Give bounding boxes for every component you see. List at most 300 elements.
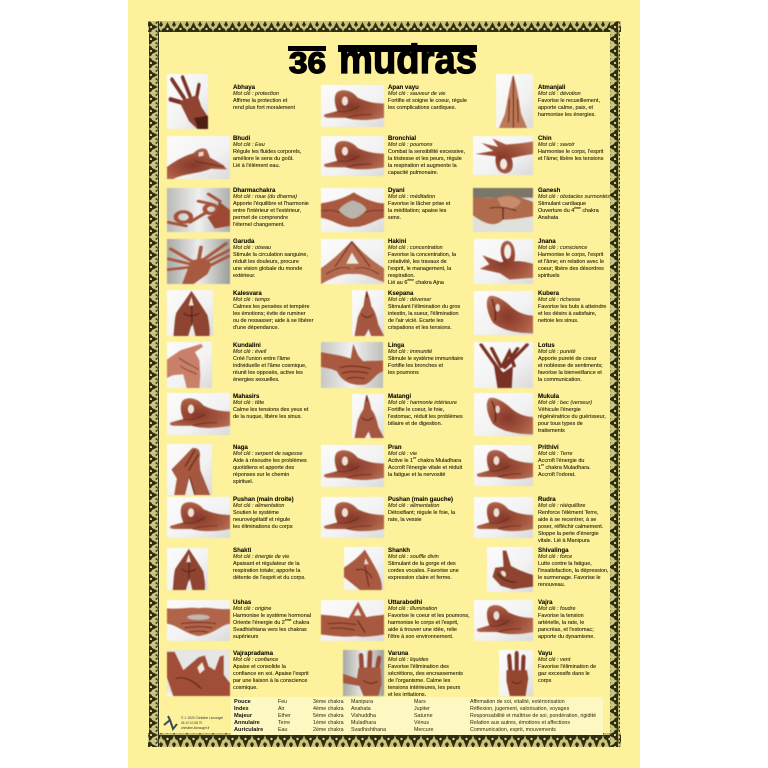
text: Dharmachakra: Apporte l'équilibre et l'harmonie bbox=[233, 200, 309, 206]
ornamental border frame bbox=[148, 21, 621, 747]
text: Shankh: Shankh bbox=[388, 546, 410, 554]
text: Vajra: artérielle, la rate, le bbox=[538, 620, 584, 626]
text: Dharmachakra: Dharmachakra bbox=[233, 186, 275, 194]
mudra: Shakti bbox=[167, 546, 317, 596]
column: chakra names: Vishuddha bbox=[351, 712, 376, 718]
text: Vajrapradama: cosmique. bbox=[233, 684, 258, 690]
text: Bronchial: la respiration et augmente la bbox=[388, 162, 457, 168]
text: Bhudi: Régule les fluides corporels, bbox=[233, 148, 301, 154]
text: Vajrapradama: Mot clé : confiance bbox=[233, 656, 278, 662]
text: Shankh: expression claire et ferme. bbox=[388, 574, 452, 580]
text: Ushas: Svadhishtana vers les chakras bbox=[233, 626, 307, 632]
text: Atmanjali: Atmanjali bbox=[538, 84, 565, 90]
text: Chin: Harmonise le corps, l'esprit bbox=[538, 148, 603, 154]
text: Jnana: Mot clé : conscience bbox=[538, 244, 587, 250]
column: elements: Terre bbox=[278, 720, 290, 726]
text: Kalesvara bbox=[233, 290, 313, 332]
column: fingers: Majeur bbox=[234, 712, 252, 718]
text: Kalesvara: d'une dépendance. bbox=[233, 324, 279, 330]
text: Garuda: extérieur. bbox=[233, 272, 255, 278]
text: Kubera: Kubera bbox=[538, 290, 559, 296]
text: Mukula: Véhicule l'énergie bbox=[538, 406, 581, 412]
column: chakra names: Muladhara bbox=[351, 720, 376, 726]
mudra: Prithivi bbox=[473, 443, 608, 493]
photo: Mukula bbox=[474, 393, 533, 436]
column: chakra names bbox=[351, 698, 386, 734]
text: Shivalinga: Shivalinga bbox=[538, 546, 568, 554]
text: Naga: Mot clé : serpent de sagesse bbox=[233, 450, 303, 456]
mudra: Atmanjali bbox=[496, 74, 600, 129]
text: Vajrapradama: confiance en soi. Apaise l'esprit bbox=[233, 670, 309, 676]
text: Linga: les poumons bbox=[388, 370, 419, 376]
photo: Bronchial bbox=[320, 136, 385, 176]
text: Ksepana: Stimulant l'élimination du gros bbox=[388, 304, 460, 310]
text: Lotus: Lotus bbox=[538, 342, 555, 348]
text: Prithivi: Accroît l'odorat. bbox=[538, 472, 576, 478]
text: Vayu: gaz excessifs dans le bbox=[538, 670, 590, 676]
text: Prithivi: 1er chakra Muladhara. bbox=[538, 463, 591, 470]
column: chakra number: 1ème chakra bbox=[313, 720, 344, 726]
text: Varuna: Favorise l'élimination des bbox=[388, 664, 449, 670]
text: Bronchial: Mot clé : poumons bbox=[388, 142, 432, 148]
mudra: Vajra bbox=[473, 598, 608, 648]
text: Shankh: Mot clé : souffle divin bbox=[388, 554, 439, 560]
text: Vajra: Vajra bbox=[538, 598, 553, 606]
photo: Garuda bbox=[166, 238, 231, 285]
mudra: Shankh bbox=[321, 546, 471, 596]
photo: Ganesh bbox=[472, 187, 534, 232]
mudra: Kubera bbox=[473, 289, 608, 339]
mudra: Rudra bbox=[473, 495, 608, 545]
contact text bbox=[181, 716, 223, 731]
text: Pushan main gauche: Détoxifiant; régule le foie, la bbox=[388, 510, 455, 516]
photo: Matangi bbox=[352, 394, 384, 438]
photo: Uttarabodhi bbox=[321, 600, 384, 641]
text: Ksepana: de l'air vicié. Ecarte les bbox=[388, 318, 443, 324]
text: Hakini: Lié au 6ème chakra Ajna bbox=[388, 278, 444, 286]
text: Shivalinga bbox=[538, 546, 609, 588]
text: Lotus: favorise la bienveillance et bbox=[538, 370, 602, 376]
text: Hakini: respiration. bbox=[388, 272, 415, 278]
photo: Vajrapradama bbox=[167, 650, 230, 696]
mudra: Garuda bbox=[166, 238, 308, 285]
text: Uttarabodhi: Mot clé : illumination bbox=[388, 606, 437, 612]
text: Apan vayu: Mot clé : sauveur de vie bbox=[388, 90, 445, 96]
photo: Kundalini bbox=[167, 342, 212, 388]
text: Pran: Mot clé : vie bbox=[388, 450, 417, 456]
mudra: Uttarabodhi bbox=[321, 598, 471, 648]
column: meanings: Réflexion, jugement, valorisation, voyages bbox=[470, 706, 569, 712]
text: Pran bbox=[388, 444, 462, 478]
photo: Prithivi bbox=[474, 445, 533, 486]
photo: Shakti bbox=[167, 548, 208, 590]
text: Shakti bbox=[233, 546, 306, 582]
mudra: Vayu bbox=[473, 649, 608, 699]
photo: Varuna bbox=[343, 650, 384, 696]
text: Shakti: Mot clé : énergie de vie bbox=[233, 554, 289, 560]
text: Chin bbox=[538, 134, 604, 162]
text: Atmanjali: Favorise le recueillement, bbox=[538, 98, 600, 104]
text: Linga bbox=[388, 342, 463, 376]
text: Garuda: une vision globale du monde bbox=[233, 266, 302, 272]
text: Rudra: aide à se recentrer, à se bbox=[538, 516, 596, 522]
photo: Naga bbox=[167, 444, 212, 495]
text: Varuna: tensions intérieures, les peurs bbox=[388, 684, 460, 690]
text: Apan vayu: les complications cardiques. bbox=[388, 104, 456, 110]
text: Hakini: Mot clé : concentration bbox=[388, 244, 443, 250]
text: Kalesvara: les émotions; évite de ruminer bbox=[233, 310, 306, 316]
text: Hakini: créativité, les travaux de bbox=[388, 258, 447, 264]
mudra: Varuna bbox=[321, 649, 471, 699]
text: Vajra: apporte du dynamisme. bbox=[538, 634, 595, 640]
table: fingers, elements, chakras, planets bbox=[231, 697, 603, 735]
contact text: © J. 2020 Christine Lionaugel bbox=[181, 716, 223, 720]
text: Kundalini bbox=[233, 342, 307, 384]
text: Naga: Aide à résoudre les problèmes bbox=[233, 458, 307, 464]
text: Ushas: supérieurs bbox=[233, 634, 258, 640]
text: Linga: Stimule le système immunitaire bbox=[388, 356, 463, 362]
mudra: Chin bbox=[472, 134, 604, 176]
mudra: Mukula bbox=[473, 392, 608, 442]
text: Pushan main droite: Soutien le système bbox=[233, 510, 279, 516]
text: Lotus: Mot clé : pureté bbox=[538, 348, 575, 354]
text: Dyani: Mot clé : méditation bbox=[388, 194, 435, 200]
text: Varuna: de l'organisme. Calme les bbox=[388, 678, 450, 684]
text: Rudra: Rudra bbox=[538, 496, 556, 502]
column: meanings: Relation aux autres, émotions et affections bbox=[470, 720, 570, 726]
mudra: Mahasirs bbox=[167, 392, 317, 442]
mudra: Shivalinga bbox=[473, 546, 608, 596]
text: Mahasirs: Mot clé : tête bbox=[233, 400, 264, 406]
text: Ganesh: Mot clé : obstacles surmontés bbox=[538, 194, 610, 200]
text: Pushan main droite: Mot clé : alimentation bbox=[233, 502, 284, 508]
text: Pushan main droite: les éliminations du corps bbox=[233, 524, 293, 530]
text: Ushas bbox=[233, 598, 311, 640]
text: Kubera: et les désirs à satisfaire, bbox=[538, 310, 596, 316]
photo: Shankh bbox=[344, 547, 384, 590]
text: Bhudi bbox=[233, 134, 301, 168]
text: Vajra: Favorise la tension bbox=[538, 612, 584, 618]
text: Bronchial: Bronchial bbox=[388, 134, 416, 142]
text: Rudra: Mot clé : rééquilibre bbox=[538, 502, 585, 508]
column: chakra names: Svadhishthana bbox=[351, 726, 386, 732]
text: Pran: Pran bbox=[388, 444, 402, 450]
text: Bhudi: améliore le sens du goût. bbox=[233, 156, 294, 162]
text: Matangi: l'estomac, réduit les problèmes bbox=[388, 414, 463, 420]
column: meanings: Responsabilité et maîtrise de soi, pondération, rigidité bbox=[470, 712, 596, 718]
photo: Pushan main gauche bbox=[321, 497, 384, 538]
text: Dharmachakra bbox=[233, 186, 309, 228]
text: Ksepana: Mot clé : déverser bbox=[388, 296, 431, 302]
text: Pushan main droite: Pushan (main droite) bbox=[233, 496, 294, 502]
text: Garuda: réduit les douleurs, procure bbox=[233, 258, 299, 264]
text: Shankh: cordes vocales. Favorise une bbox=[388, 568, 459, 574]
photo: Ushas bbox=[167, 600, 230, 641]
text: Matangi: Fortifie le coeur, le foie, bbox=[388, 406, 444, 412]
text: Vajra bbox=[538, 598, 595, 640]
logo and contact bbox=[161, 713, 225, 733]
text: Bronchial bbox=[388, 134, 465, 176]
text: Naga: réponses sur le chemin bbox=[233, 472, 289, 478]
title: 36 bbox=[289, 47, 326, 80]
column: planets: Vénus bbox=[414, 720, 429, 726]
column: elements: Air bbox=[278, 706, 284, 712]
mudra: Ksepana bbox=[321, 289, 471, 339]
column: chakra number bbox=[313, 698, 344, 734]
mudra: Bronchial bbox=[320, 134, 465, 176]
text: Bhudi: Mot clé : Eau bbox=[233, 142, 265, 148]
text: Vajrapradama: par une liaison à la conscience bbox=[233, 678, 307, 684]
text: Mahasirs: de la nuque, libère les sinus. bbox=[233, 414, 302, 420]
mudra: Abhaya bbox=[166, 74, 296, 130]
mudra: Hakini bbox=[320, 238, 456, 286]
contact text: 06 10 10 58 70 bbox=[181, 721, 202, 725]
text: Prithivi: Accroît l'énergie du bbox=[538, 458, 584, 464]
mudra: Apan vayu bbox=[320, 84, 467, 128]
text: Bhudi: Bhudi bbox=[233, 134, 250, 142]
text: Prithivi: Mot clé : Terre bbox=[538, 450, 573, 456]
text: Abhaya: Affirme la protection et bbox=[233, 98, 287, 104]
text: Jnana bbox=[538, 238, 604, 278]
column: chakra number: 5ème chakra bbox=[313, 712, 344, 718]
column: chakra number: 2ème chakra bbox=[313, 726, 344, 732]
mudra: Kalesvara bbox=[166, 290, 314, 337]
text: Rudra: poser, réfléchir calmement. bbox=[538, 524, 603, 530]
text: Hakini: l'esprit, le management, la bbox=[388, 266, 451, 272]
text: Atmanjali: apporte calme, paix, et bbox=[538, 104, 593, 110]
text: Atmanjali: Mot clé : dévotion bbox=[538, 90, 581, 96]
text: Garuda: Stimule la circulation sanguine, bbox=[233, 252, 308, 258]
text: Mukula: Mot clé : bec (verseur) bbox=[538, 400, 592, 406]
text: Pran: Active le 1er chakra Muladhara bbox=[388, 456, 461, 464]
text: Varuna bbox=[388, 650, 463, 698]
column: elements: Ether bbox=[278, 712, 291, 718]
text: Shakti: respiration totale; apporte la bbox=[233, 568, 300, 574]
text: Ksepana: intestin, la sueur, l'élimination bbox=[388, 310, 459, 316]
column: fingers: Index bbox=[234, 706, 249, 712]
text: Ushas: Oriente l'énergie du 2ème chakra bbox=[233, 618, 309, 626]
mudra: Linga bbox=[321, 341, 471, 391]
column: fingers: Pouce bbox=[234, 698, 251, 704]
column: chakra names: Manipura bbox=[351, 698, 373, 704]
text: Pushan main droite: neurovégétatif et régule bbox=[233, 516, 290, 522]
text: Matangi: biliaire et de digestion. bbox=[388, 420, 442, 426]
text: Jnana: Jnana bbox=[538, 238, 556, 244]
text: Uttarabodhi: l'être à son environnement. bbox=[388, 634, 453, 640]
text: Chin: Chin bbox=[538, 134, 552, 142]
text: Jnana: spirituels bbox=[538, 272, 559, 278]
text: Dyani: Dyani bbox=[388, 186, 405, 194]
text: Pushan main gauche: rate, la vessie bbox=[388, 516, 422, 522]
text: Rudra: vitale. Lié à Manipura bbox=[538, 538, 590, 544]
text: Rudra: Renforce l'élément Terre, bbox=[538, 510, 598, 516]
text: Shakti: Shakti bbox=[233, 546, 251, 554]
column: planets: Mars bbox=[414, 698, 426, 704]
column: planets bbox=[414, 698, 433, 734]
text: Matangi: Mot clé : harmonie intérieure bbox=[388, 400, 457, 406]
text: Shankh: Stimulant de la gorge et des bbox=[388, 560, 456, 566]
photo: Kalesvara bbox=[166, 290, 214, 337]
photo: Dyani bbox=[320, 188, 385, 232]
photo: Pushan main droite bbox=[167, 497, 230, 538]
column: elements: Eau bbox=[278, 726, 287, 732]
column: planets: Jupiter bbox=[414, 706, 430, 712]
photo: Lotus bbox=[474, 342, 533, 388]
text: Kalesvara: Calmes les pensées et tempère bbox=[233, 304, 309, 310]
text: Vajrapradama: Apaise et consolide la bbox=[233, 664, 286, 670]
text: Jnana: et l'âme; en relation avec le bbox=[538, 258, 604, 264]
text: Ksepana bbox=[388, 290, 460, 332]
text: Garuda: Garuda bbox=[233, 238, 254, 244]
photo: Vayu bbox=[499, 650, 533, 696]
text: Uttarabodhi: aide à trouver une idée, relie bbox=[388, 626, 457, 632]
mudra: Ushas bbox=[167, 598, 317, 648]
text: Varuna: sécrétions, des encrassements bbox=[388, 670, 463, 676]
text: Kalesvara: ou de ressasser; aide à se libérer bbox=[233, 318, 313, 324]
text: Naga bbox=[233, 444, 307, 486]
text: Shankh bbox=[388, 546, 459, 582]
mudra: Ganesh bbox=[472, 186, 610, 232]
text: Abhaya: Mot clé : protection bbox=[233, 90, 279, 96]
text: Shakti: détente de l'esprit et du corps. bbox=[233, 574, 306, 580]
text: Rudra: Stoppe la perte d'énergie bbox=[538, 530, 599, 536]
column: fingers bbox=[234, 698, 263, 734]
text: Kalesvara: Mot clé : temps bbox=[233, 296, 270, 302]
photo: Rudra bbox=[474, 497, 533, 538]
text: Vayu: Vayu bbox=[538, 650, 552, 656]
photo: Linga bbox=[321, 342, 383, 388]
text: Shivalinga: renouveau. bbox=[538, 582, 565, 588]
text: Dyani: sens. bbox=[388, 214, 401, 220]
text: Linga: Fortifie les bronches et bbox=[388, 362, 443, 368]
text: Ganesh: Ouverture du 4ème chakra bbox=[538, 206, 599, 214]
text: Varuna: Varuna bbox=[388, 650, 408, 656]
mudra: Matangi bbox=[321, 392, 471, 442]
text: Garuda: Mot clé : oiseau bbox=[233, 244, 271, 250]
text: Dharmachakra: permet de comprendre bbox=[233, 214, 288, 220]
text: Jnana: Harmonise le corps, l'esprit bbox=[538, 252, 603, 258]
text: Dharmachakra: entre l'intérieur et l'extérieur, bbox=[233, 208, 301, 214]
text: Hakini bbox=[388, 238, 456, 286]
photo: Shivalinga bbox=[487, 547, 533, 592]
text: Jnana: coeur; libère des désordres bbox=[538, 266, 604, 272]
text: Mahasirs bbox=[233, 392, 308, 420]
text: Uttarabodhi: Uttarabodhi bbox=[388, 598, 422, 606]
mudra: Pushan main gauche bbox=[321, 495, 471, 545]
text: Lotus: la communication. bbox=[538, 376, 582, 382]
text: Rudra bbox=[538, 496, 603, 544]
text: Dyani: la méditation; apaise les bbox=[388, 208, 446, 214]
mudra: Jnana bbox=[474, 238, 604, 284]
text: Matangi: Matangi bbox=[388, 392, 411, 400]
text: Atmanjali: harmonise les énergies. bbox=[538, 112, 596, 118]
text: Varuna: et les irritations. bbox=[388, 692, 426, 698]
column: chakra number: 3ème chakra bbox=[313, 698, 344, 704]
text: Kundalini: individuelle et l'âme cosmique, bbox=[233, 362, 307, 368]
text: Ushas: Mot clé : origine bbox=[233, 606, 271, 612]
text: Mahasirs: Mahasirs bbox=[233, 392, 259, 400]
text: Vayu: corps bbox=[538, 678, 551, 684]
text: Chin: et l'âme; libère les tensions bbox=[538, 156, 603, 162]
text: Abhaya bbox=[233, 84, 296, 110]
text: Ganesh: Ganesh bbox=[538, 186, 560, 194]
photo: Vajra bbox=[474, 600, 533, 641]
text: Atmanjali bbox=[538, 84, 600, 118]
text: Apan vayu: Fortifie et soigne le coeur, régule bbox=[388, 98, 467, 104]
text: Ushas: Ushas bbox=[233, 598, 251, 606]
mudra: Bhudi bbox=[166, 134, 301, 180]
text: Apan vayu bbox=[388, 84, 467, 110]
mudra: Vajrapradama bbox=[167, 649, 317, 699]
text: Shakti: Apaisant et régulateur de la bbox=[233, 560, 300, 566]
text: Ksepana: crispations et les tensions. bbox=[388, 324, 452, 330]
text: Vayu: Mot clé : vent bbox=[538, 656, 570, 662]
photo: Ksepana bbox=[352, 290, 384, 336]
text: Abhaya: rend plus fort moralement bbox=[233, 104, 295, 110]
photo: Dharmachakra bbox=[166, 188, 231, 232]
text: Naga: Naga bbox=[233, 444, 248, 450]
text: Linga: Mot clé : immunité bbox=[388, 348, 432, 354]
text: Garuda bbox=[233, 238, 308, 278]
text: Mukula: Mukula bbox=[538, 392, 559, 400]
text: Kundalini: Mot clé : éveil bbox=[233, 348, 266, 354]
photo: Bhudi bbox=[166, 136, 230, 180]
text: Pushan main droite bbox=[233, 496, 294, 530]
text: Bronchial: Combat la sensibilité excessive, bbox=[388, 148, 465, 154]
text: Kubera bbox=[538, 290, 606, 324]
text: Ksepana: Ksepana bbox=[388, 290, 413, 296]
mudra: Kundalini bbox=[167, 341, 317, 391]
column: elements bbox=[278, 698, 291, 734]
icon: logo bbox=[162, 714, 179, 732]
text: Mahasirs: Calme les tensions des yeux et bbox=[233, 406, 308, 412]
title bbox=[288, 36, 477, 82]
photo: Kubera bbox=[474, 291, 533, 335]
text: Shivalinga: le surmenage. Favorise le bbox=[538, 574, 601, 580]
text: Ganesh bbox=[538, 186, 610, 220]
text: Ganesh: Anahata bbox=[538, 214, 558, 220]
text: Apan vayu: Apan vayu bbox=[388, 84, 419, 90]
column: chakra names: Anahata bbox=[351, 706, 371, 712]
photo: Atmanjali bbox=[496, 74, 534, 129]
text: Matangi bbox=[388, 392, 463, 428]
text: Bronchial: la tristesse et les peurs, régule bbox=[388, 156, 462, 162]
mudra: Pushan main droite bbox=[167, 495, 317, 545]
photo: Chin bbox=[472, 136, 534, 176]
poster background bbox=[128, 0, 640, 768]
text: Pran: la fatigue et la nervosité bbox=[388, 472, 445, 478]
column: fingers: Annulaire bbox=[234, 720, 260, 726]
contact text: christine-lionaugel.fr bbox=[181, 726, 210, 730]
text: Bhudi: Lié à l'élément eau. bbox=[233, 162, 280, 168]
text: Uttarabodhi: harmonise le corps et l'esprit, bbox=[388, 620, 459, 626]
text: Pushan main gauche bbox=[388, 496, 455, 524]
photo: Hakini bbox=[320, 238, 385, 284]
text: Vajrapradama: Vajrapradama bbox=[233, 650, 273, 656]
mudra: Dharmachakra bbox=[166, 186, 309, 232]
text: Varuna: Mot clé : liquides bbox=[388, 656, 428, 662]
text: Shivalinga: Lutte contre la fatigue, bbox=[538, 560, 592, 566]
text: Naga: quotidiens et apporte des bbox=[233, 464, 294, 470]
text: Shivalinga: l'insatisfaction, la dépression, bbox=[538, 568, 609, 574]
mudra: Naga bbox=[167, 443, 317, 493]
column: meanings bbox=[470, 698, 596, 734]
text: Vajra: pancréas, et l'estomac; bbox=[538, 626, 594, 632]
text: Lotus bbox=[538, 342, 603, 384]
text: Uttarabodhi bbox=[388, 598, 470, 640]
text: Prithivi: Prithivi bbox=[538, 444, 559, 450]
text: Linga: Linga bbox=[388, 342, 404, 348]
